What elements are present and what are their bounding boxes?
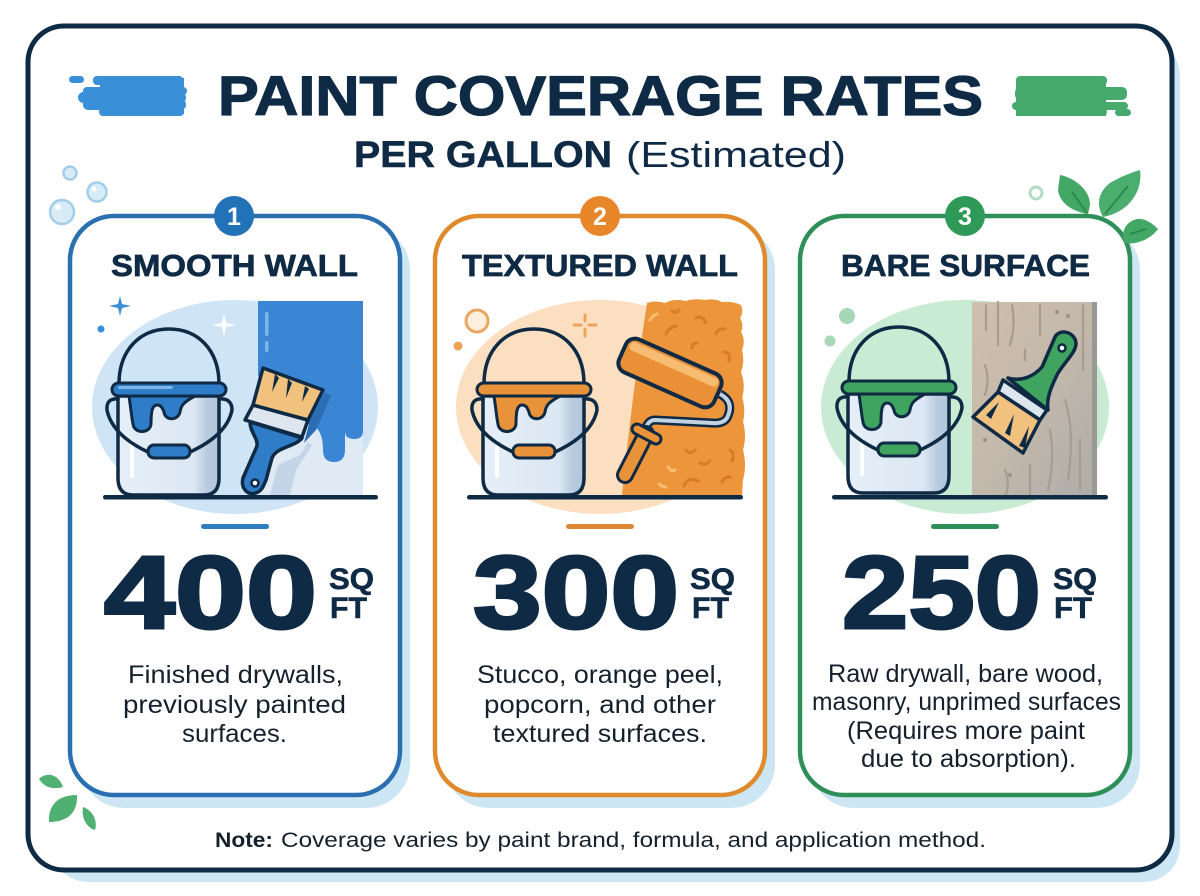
description: surfaces. [182,720,287,748]
icon: bubbles [50,166,106,224]
footnote: Coverage varies by paint brand, formula, and application method. [281,829,986,852]
icon: paint bucket [472,329,597,495]
description [123,661,346,748]
number badge 2 [580,196,620,236]
panel: smooth wall [70,196,410,808]
icon: paint roller [615,335,730,475]
description: textured surfaces. [493,720,707,748]
stat: 400 sq ft: 400 [104,535,317,650]
description: Finished drywalls, [128,661,343,689]
number badge 3 [945,196,985,236]
icon: paint brush [242,368,331,495]
description: previously painted [123,691,346,719]
divider [931,524,999,529]
description: Stucco, orange peel, [477,661,723,689]
description: due to absorption). [861,745,1076,773]
illustration: bucket and roller on textured wall [454,299,745,514]
number badge 1 [214,196,254,236]
heading: smooth wall: SMOOTH WALL [111,248,358,283]
description: Raw drywall, bare wood, [828,660,1103,688]
stat: 250 sq ft: FT [1054,592,1092,625]
stat: 300 sq ft: SQ [690,563,735,596]
description [477,661,723,748]
heading: bare surface: BARE SURFACE [841,248,1090,283]
illustration: bucket and brush on bare wood [821,187,1109,514]
icon: paint bucket [837,327,962,493]
stat: 300 sq ft: 300 [473,535,679,650]
icon: paint brush [973,332,1076,453]
icon: leaves top right [1058,170,1158,243]
stat: 300 sq ft [473,535,735,650]
description: masonry, unprimed surfaces [812,688,1121,716]
number badge 3: 3 [958,203,972,231]
panel: textured wall [435,196,775,808]
stat: 400 sq ft: FT [330,592,367,625]
number badge 1: 1 [227,203,241,231]
stat: 400 sq ft: SQ [329,563,374,596]
title: PAINT COVERAGE RATES [218,64,983,127]
stat: 250 sq ft: 250 [842,535,1041,650]
icon: leaves bottom left [39,775,96,830]
subtitle: PER GALLON [354,134,612,175]
number badge 2: 2 [593,203,607,231]
divider [566,524,634,529]
description: popcorn, and other [484,691,716,719]
illustration: bucket and brush on smooth wall [92,296,378,514]
footnote: Note: [215,829,273,852]
stat: 400 sq ft [104,535,374,650]
heading: textured wall: TEXTURED WALL [462,248,738,283]
description [812,660,1121,773]
stat: 250 sq ft: SQ [1053,563,1097,596]
description: (Requires more paint [847,717,1085,745]
icon: paint bucket [107,329,232,495]
stat: 300 sq ft: FT [692,592,729,625]
panel: bare surface [800,187,1140,808]
subtitle [354,134,846,175]
stat: 250 sq ft [842,535,1097,650]
icon: green paint stroke [1012,76,1131,116]
icon: blue paint stroke [69,76,187,116]
divider [201,524,269,529]
subtitle: (Estimated) [626,134,846,175]
